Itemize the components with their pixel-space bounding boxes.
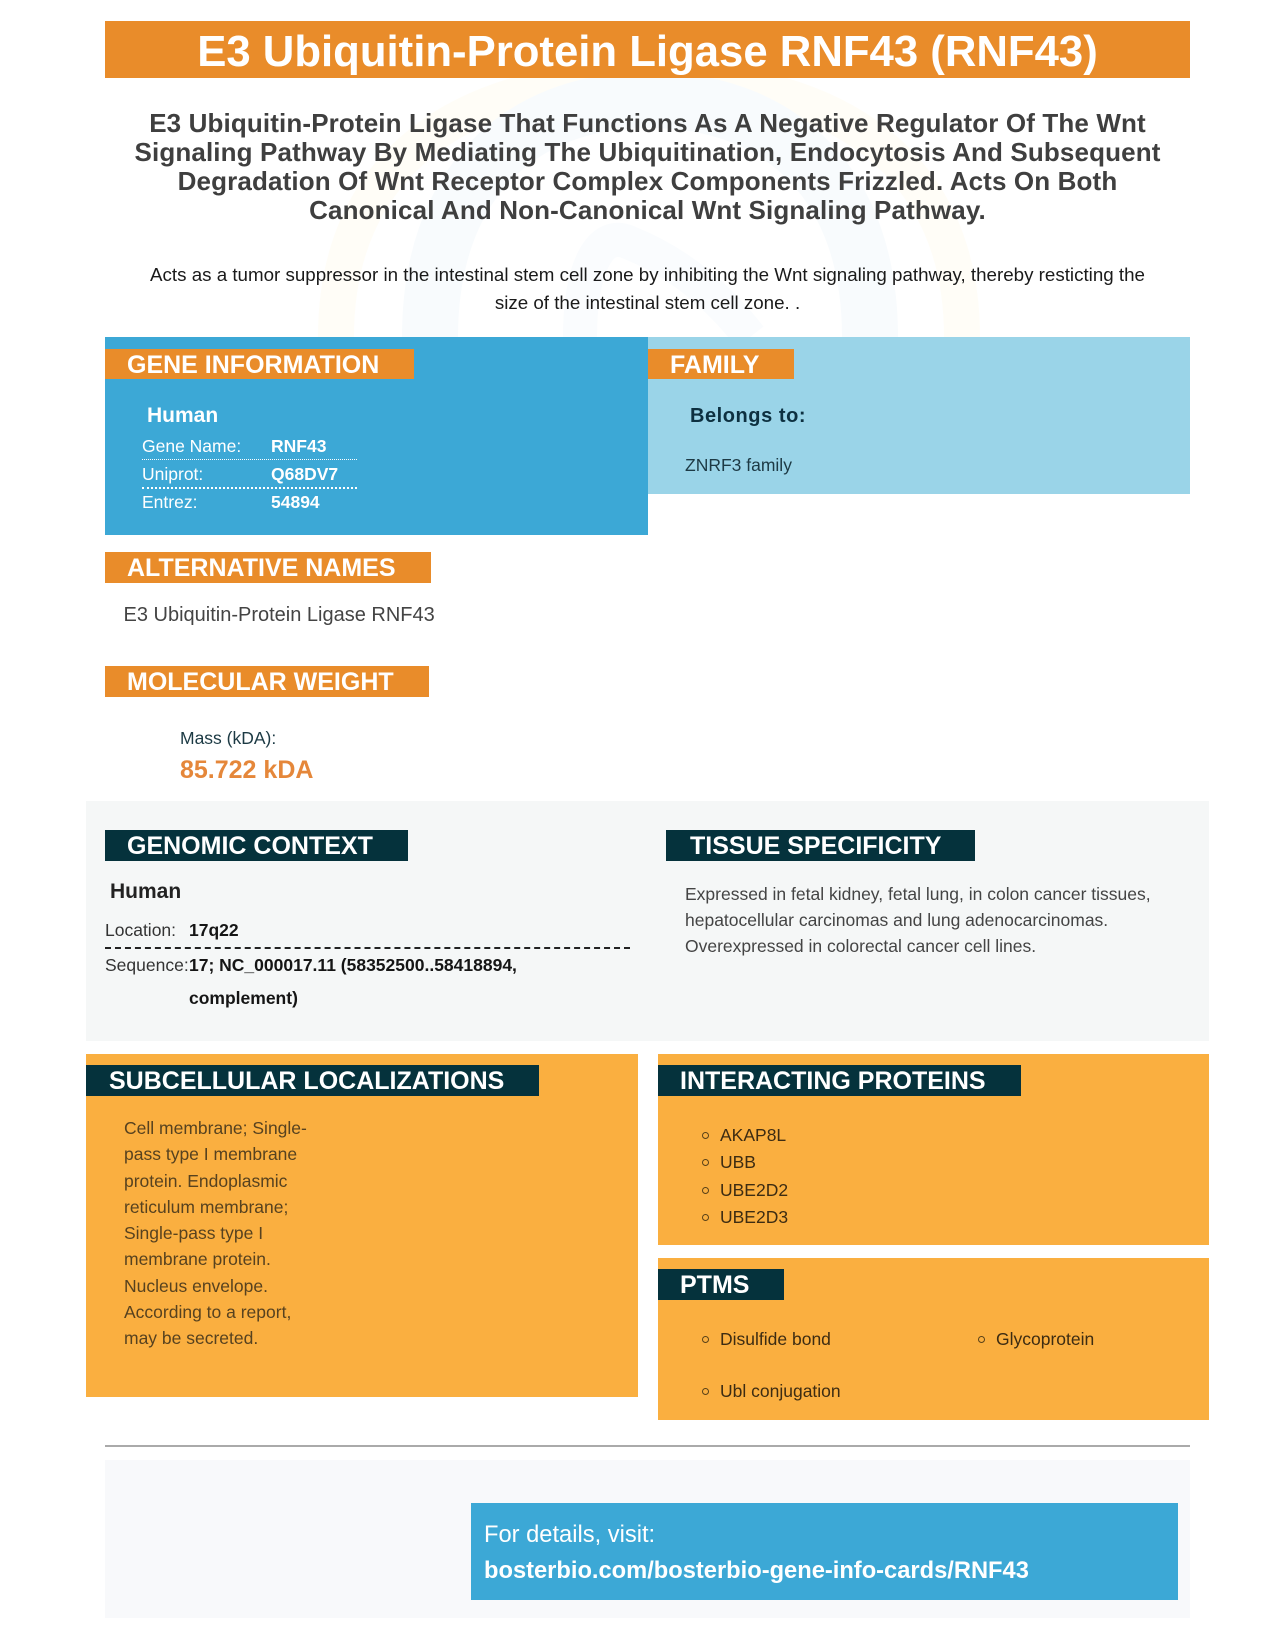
subtitle: Signaling Pathway By Mediating The Ubiquitination, Endocytosis And Subsequent xyxy=(134,137,1160,167)
section: alternative names xyxy=(105,552,435,626)
description paragraph xyxy=(150,264,1145,313)
protein list: AKAP8L xyxy=(720,1125,786,1145)
sequence row: 17; NC_000017.11 (58352500..58418894, xyxy=(189,955,517,975)
tissue specificity text: Overexpressed in colorectal cancer cell lines. xyxy=(685,936,1036,956)
belongs to label: Belongs to: xyxy=(690,405,806,427)
heading: alternative names: ALTERNATIVE NAMES xyxy=(127,554,396,582)
species label: Human xyxy=(147,404,218,427)
sequence row: Sequence: xyxy=(105,955,189,975)
heading: gene information: GENE INFORMATION xyxy=(127,351,379,379)
mass value: 85.722 kDA xyxy=(180,756,313,784)
heading: genomic context: GENOMIC CONTEXT xyxy=(127,832,373,860)
heading: interacting proteins: INTERACTING PROTEINS xyxy=(680,1067,986,1095)
family name: ZNRF3 family xyxy=(685,455,792,475)
mass label: Mass (kDA): xyxy=(180,728,276,748)
location row: Location: xyxy=(105,920,176,940)
heading: family: FAMILY xyxy=(670,351,759,379)
localization text: membrane protein. xyxy=(124,1249,271,1269)
localization text: According to a report, xyxy=(124,1302,291,1322)
callout url: bosterbio.com/bosterbio-gene-info-cards/RNF43 xyxy=(484,1558,1029,1584)
uniprot row: Uniprot: xyxy=(142,464,203,484)
uniprot row: Q68DV7 xyxy=(271,464,338,484)
localization text: pass type I membrane xyxy=(124,1144,297,1164)
protein list: UBE2D3 xyxy=(720,1207,788,1227)
callout label: For details, visit: xyxy=(484,1522,655,1548)
heading: ptms: PTMS xyxy=(680,1271,749,1299)
background watermark: faint arches xyxy=(280,78,1020,337)
localization text: protein. Endoplasmic xyxy=(124,1170,287,1190)
panel: family xyxy=(648,337,1190,494)
gene name row: Gene Name: xyxy=(142,436,241,456)
subtitle: Canonical And Non-Canonical Wnt Signaling Pathway. xyxy=(309,195,986,225)
ptm list: Disulfide bond xyxy=(720,1329,831,1349)
gene name row: RNF43 xyxy=(271,436,326,456)
tissue specificity text: hepatocellular carcinomas and lung adenocarcinomas. xyxy=(685,910,1108,930)
sequence row: complement) xyxy=(189,988,298,1008)
description paragraph: Acts as a tumor suppressor in the intestinal stem cell zone by inhibiting the Wnt signaling pathway, thereby resticting the xyxy=(150,264,1145,285)
alternative name text: E3 Ubiquitin-Protein Ligase RNF43 xyxy=(124,604,435,626)
entrez row: Entrez: xyxy=(142,492,197,512)
ptm list xyxy=(702,1329,1094,1401)
ptm list: Glycoprotein xyxy=(996,1329,1094,1349)
subtitle xyxy=(134,108,1160,225)
dashed divider xyxy=(105,947,630,949)
sequence row xyxy=(105,955,517,1008)
entrez row xyxy=(142,492,320,512)
gene name row xyxy=(142,435,357,460)
species label: Human xyxy=(110,880,181,903)
localization text: reticulum membrane; xyxy=(124,1197,288,1217)
description paragraph: size of the intestinal stem cell zone. . xyxy=(495,292,800,313)
localization text: may be secreted. xyxy=(124,1328,258,1348)
localization text: Nucleus envelope. xyxy=(124,1276,268,1296)
subtitle: E3 Ubiquitin-Protein Ligase That Functions As A Negative Regulator Of The Wnt xyxy=(149,108,1146,138)
localization text xyxy=(124,1118,307,1348)
panel: interacting proteins xyxy=(658,1054,1209,1245)
heading: family xyxy=(648,349,794,379)
panel: subcellular localizations xyxy=(86,1054,638,1397)
location row xyxy=(105,920,239,940)
localization text: Single-pass type I xyxy=(124,1223,263,1243)
title: E3 Ubiquitin-Protein Ligase RNF43 (RNF43) xyxy=(197,27,1098,76)
localization text: Cell membrane; Single- xyxy=(124,1118,307,1138)
tissue specificity text xyxy=(685,884,1151,956)
subtitle: Degradation Of Wnt Receptor Complex Components Frizzled. Acts On Both xyxy=(178,166,1117,196)
tissue specificity text: Expressed in fetal kidney, fetal lung, in colon cancer tissues, xyxy=(685,884,1151,904)
protein list: UBE2D2 xyxy=(720,1180,788,1200)
panel: footer xyxy=(105,1460,1190,1618)
heading: subcellular localizations: SUBCELLULAR LOCALIZATIONS xyxy=(109,1067,504,1095)
callout: details link xyxy=(471,1503,1178,1600)
heading: molecular weight: MOLECULAR WEIGHT xyxy=(127,668,394,696)
entrez row: 54894 xyxy=(271,492,320,512)
section: molecular weight xyxy=(105,666,429,784)
protein list: UBB xyxy=(720,1152,756,1172)
protein list xyxy=(702,1125,788,1227)
heading: ptms xyxy=(658,1269,784,1300)
panel: gene information xyxy=(105,337,648,535)
panel: ptms xyxy=(658,1258,1209,1420)
panel: genomic context and tissue specificity xyxy=(86,801,1209,1041)
uniprot row xyxy=(142,462,357,489)
ptm list: Ubl conjugation xyxy=(720,1381,841,1401)
location row: 17q22 xyxy=(189,920,239,940)
heading: tissue specificity: TISSUE SPECIFICITY xyxy=(690,832,941,860)
